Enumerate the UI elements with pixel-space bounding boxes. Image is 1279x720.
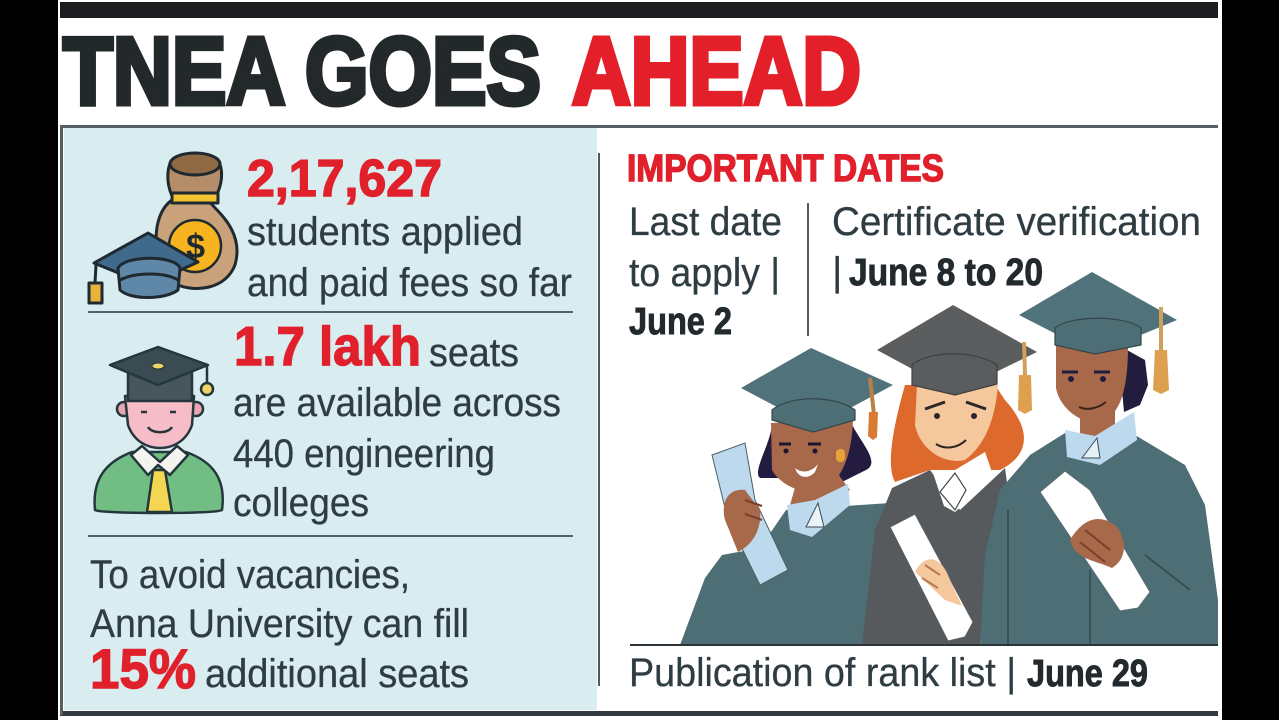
stat: students applied: and paid fees so far — [247, 261, 572, 305]
date: last date to apply: to apply | — [629, 251, 780, 295]
stat: seats available: 440 engineering — [233, 432, 495, 476]
date: last date to apply — [629, 200, 782, 343]
stat: students applied: students applied — [247, 210, 523, 254]
stat: students applied: 2,17,627 — [247, 150, 442, 208]
left graduate — [680, 348, 893, 645]
text block: additional seats: 15% — [90, 637, 196, 700]
date: publication of rank list: Publication of rank list | — [629, 651, 1016, 695]
date: last date to apply: Last date — [629, 200, 782, 244]
heading: important dates: IMPORTANT DATES — [627, 148, 944, 190]
text block: additional seats: To avoid vacancies, — [90, 553, 410, 597]
middle graduate — [862, 305, 1037, 645]
title: TNEA GOES — [63, 18, 541, 125]
panel: important dates — [627, 148, 1201, 343]
date: publication of rank list: June 29 — [1027, 653, 1148, 695]
stat: seats available: are available across — [233, 381, 561, 425]
stat: seats available — [233, 315, 561, 525]
date: certificate verification: | — [832, 250, 842, 294]
text block: additional seats: Anna University can fill — [90, 602, 469, 646]
text block: additional seats — [90, 553, 469, 700]
stat: seats available: colleges — [233, 481, 369, 525]
right graduate — [980, 272, 1218, 645]
date: certificate verification: June 8 to 20 — [849, 252, 1043, 294]
illustration: three graduates — [680, 272, 1218, 645]
panel: key numbers — [60, 125, 1218, 715]
title: AHEAD — [572, 18, 861, 125]
panel: key numbers: $ — [186, 228, 205, 266]
text block: additional seats: additional seats — [205, 652, 469, 696]
icon: graduate student — [95, 347, 223, 513]
date: certificate verification: Certificate verification — [832, 200, 1201, 244]
stat: seats available: seats — [429, 331, 519, 375]
stat: students applied — [247, 150, 572, 305]
date: certificate verification — [832, 200, 1201, 294]
icon: money bag and graduation cap — [89, 153, 237, 303]
stat: seats available: 1.7 lakh — [234, 315, 421, 377]
date: last date to apply: June 2 — [629, 301, 732, 343]
